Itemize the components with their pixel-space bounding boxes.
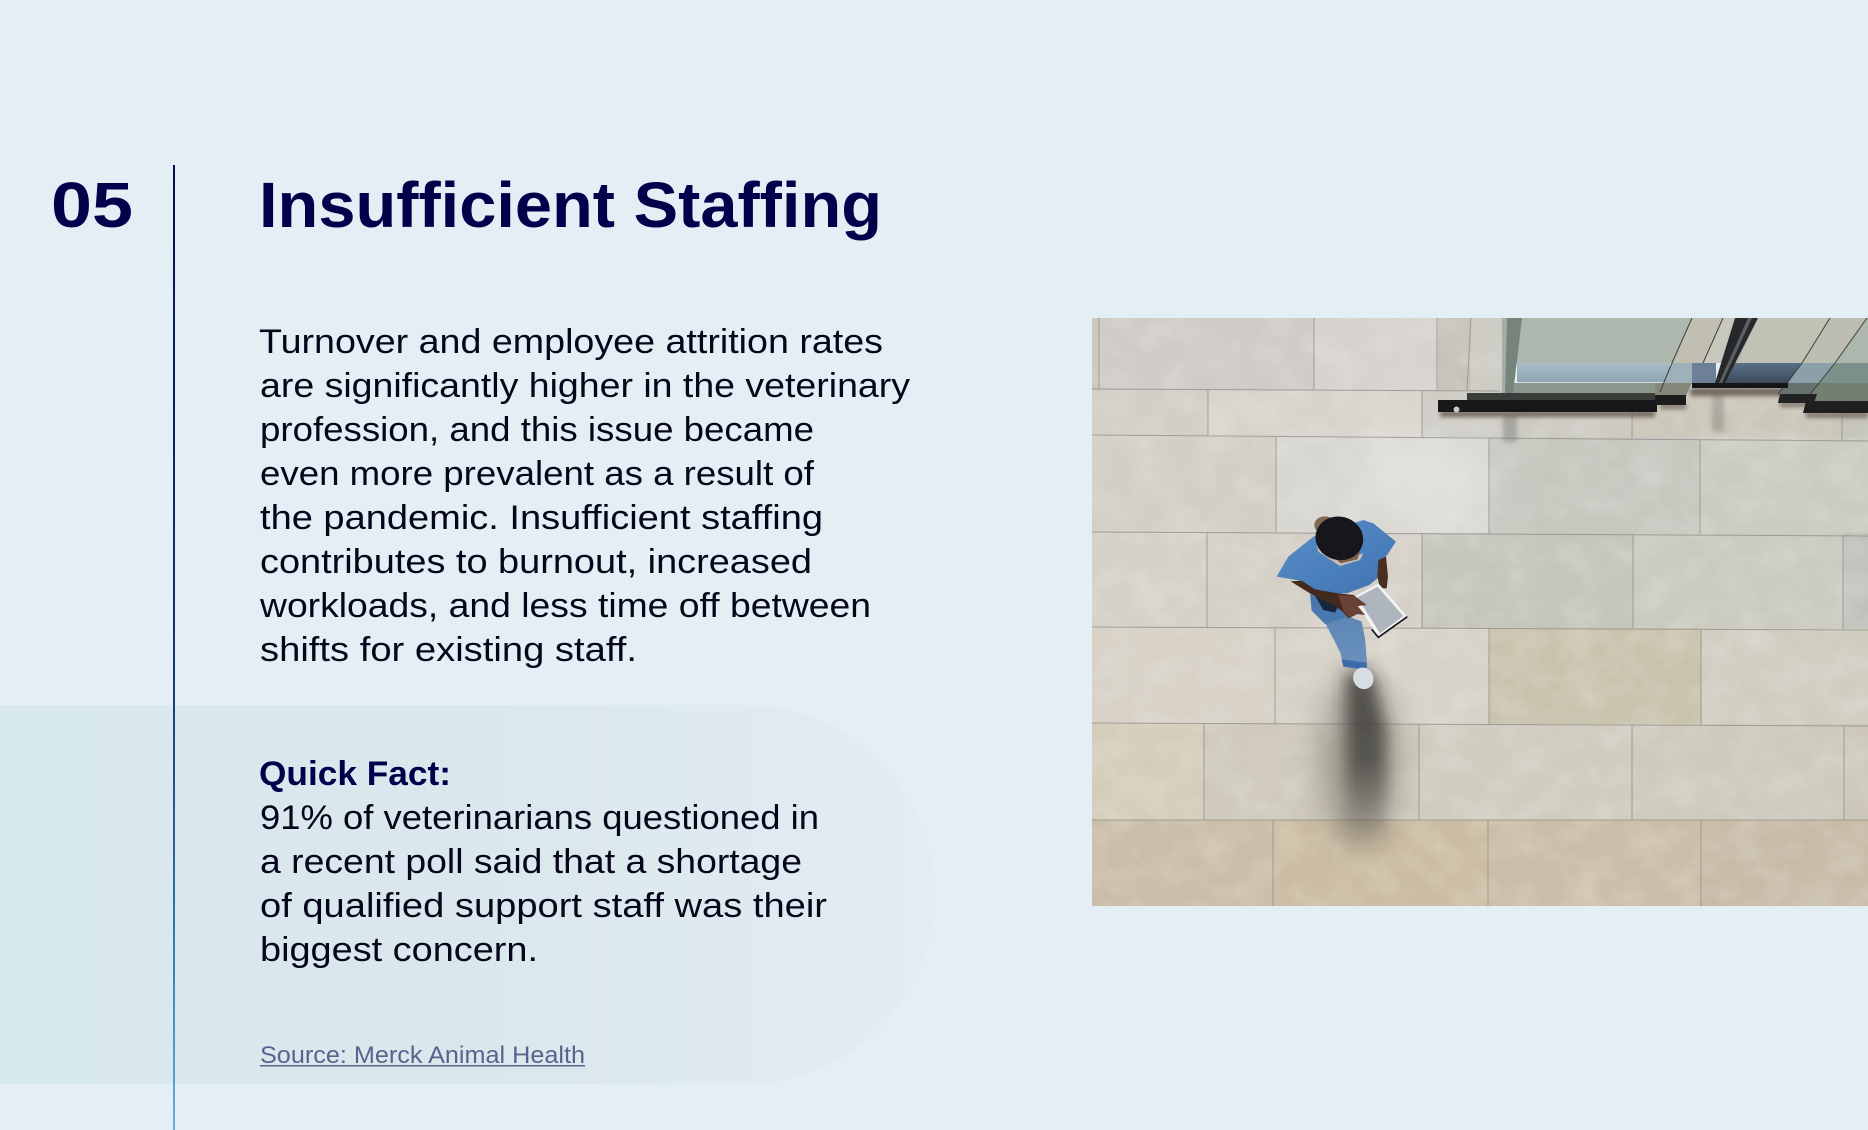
photo: clinician seen from above on stone floor xyxy=(1092,318,1868,906)
glass reflection strip xyxy=(1517,363,1868,384)
source link: Source: Merck Animal Health xyxy=(260,1042,585,1069)
body paragraph: workloads, and less time off between xyxy=(259,587,871,625)
quick fact heading: Quick Fact: xyxy=(259,755,451,793)
trousers xyxy=(1325,616,1367,667)
quick fact statement: 91% of veterinarians questioned in xyxy=(260,799,819,837)
far arm xyxy=(1377,557,1388,588)
body paragraph: Turnover and employee attrition rates xyxy=(259,323,883,361)
panel: quick fact background pill xyxy=(0,705,934,1084)
glass panels xyxy=(1502,318,1868,363)
lower glass xyxy=(1513,383,1655,393)
door post xyxy=(1505,318,1522,393)
collar and neck xyxy=(1317,545,1363,566)
floor tiles xyxy=(1092,318,1868,906)
rail bolt xyxy=(1454,406,1460,412)
quick fact statement: a recent poll said that a shortage xyxy=(260,843,802,881)
section number: 05 xyxy=(51,169,133,241)
quick fact text xyxy=(259,755,827,969)
vertical rule xyxy=(173,165,175,1130)
body paragraph: are significantly higher in the veterinary xyxy=(260,367,910,405)
black floor rail xyxy=(1438,383,1868,413)
tablet xyxy=(1353,583,1407,637)
quick fact statement: biggest concern. xyxy=(260,931,538,969)
diagonal post xyxy=(1715,318,1758,383)
pocket xyxy=(1315,596,1338,613)
thin door edges xyxy=(1660,318,1867,402)
quick fact statement xyxy=(260,799,827,969)
body paragraph: shifts for existing staff. xyxy=(260,631,637,669)
near arm xyxy=(1291,581,1367,618)
rail and post cast shadows xyxy=(1440,387,1868,442)
title: Insufficient Staffing xyxy=(259,169,882,241)
quick fact statement: of qualified support staff was their xyxy=(260,887,827,925)
body paragraph: the pandemic. Insufficient staffing xyxy=(260,499,823,537)
scrub top xyxy=(1277,520,1396,593)
body paragraph xyxy=(259,323,910,669)
stone texture xyxy=(1092,318,1868,906)
shadow of figure xyxy=(1320,672,1396,850)
glass door structure xyxy=(1438,318,1868,442)
light patch on floor xyxy=(1389,436,1464,512)
figure: clinician with tablet xyxy=(1277,511,1407,693)
hair xyxy=(1314,516,1331,530)
body paragraph: even more prevalent as a result of xyxy=(260,455,815,493)
shoe xyxy=(1353,668,1374,690)
body paragraph: profession, and this issue became xyxy=(260,411,814,449)
body paragraph: contributes to burnout, increased xyxy=(260,543,812,581)
grout lines xyxy=(1092,318,1868,906)
